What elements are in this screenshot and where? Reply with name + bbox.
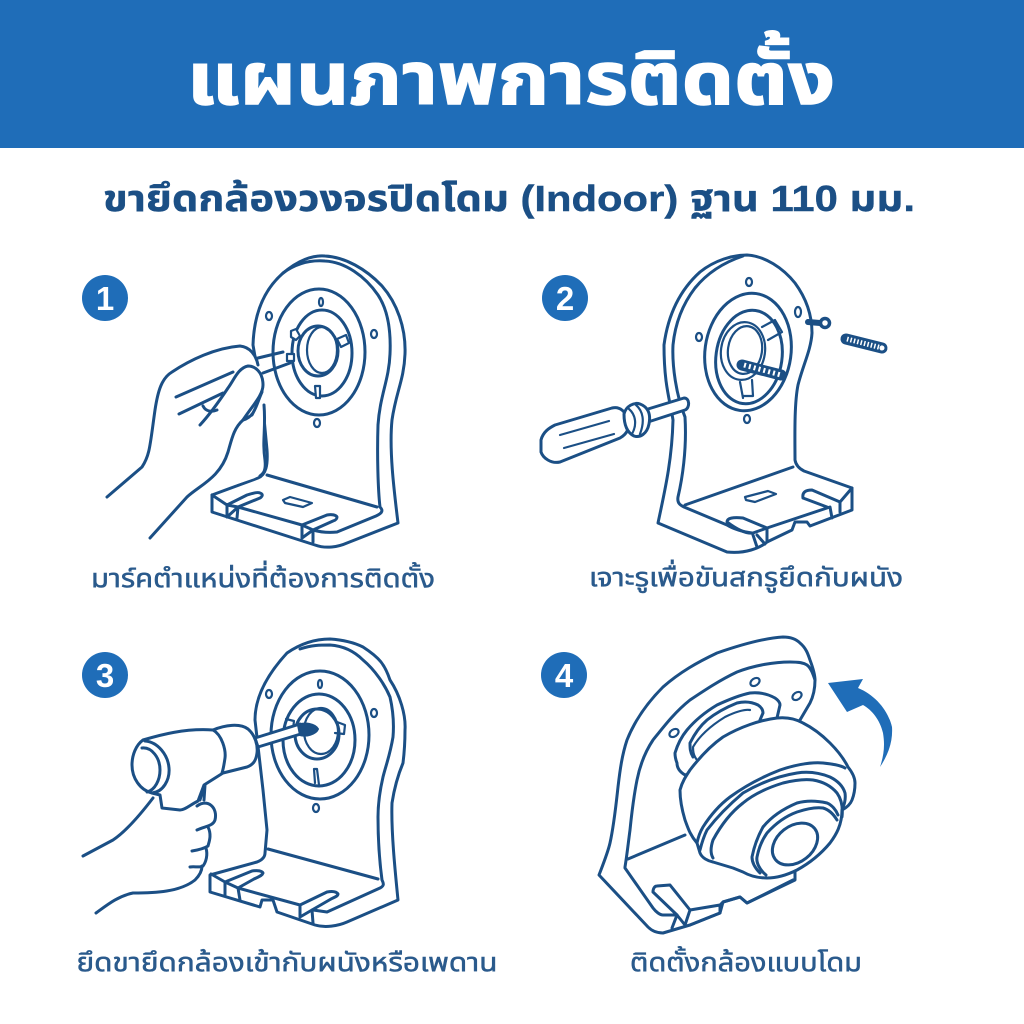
mounting ring 4 bbox=[675, 693, 780, 775]
subtitle: ขายึดกล้องวงจรปิดโดม (Indoor) ฐาน 110 มม. bbox=[103, 178, 915, 219]
drill bit bbox=[255, 724, 318, 747]
arrow bbox=[828, 679, 892, 767]
panel: step 4 bbox=[541, 637, 892, 977]
badge 3 bbox=[82, 652, 128, 698]
left slot 1 bbox=[212, 493, 262, 518]
left slot 2 bbox=[727, 518, 767, 547]
right slot 1 bbox=[238, 507, 337, 542]
screw in centre bbox=[742, 365, 781, 375]
badge 2 bbox=[542, 275, 588, 321]
dome camera bbox=[680, 718, 855, 878]
badge 4 bbox=[541, 652, 587, 698]
hand holding pen bbox=[107, 346, 267, 538]
bracket 4 bbox=[599, 637, 815, 933]
centre slot 2 bbox=[745, 491, 776, 502]
title banner: แผนภาพการติดตั้ง bbox=[187, 31, 835, 120]
screw loose bbox=[846, 339, 884, 350]
screw at hole bbox=[808, 318, 830, 328]
hand on drill bbox=[83, 797, 216, 913]
panel: step 3 bbox=[76, 639, 498, 977]
title banner bbox=[0, 0, 1024, 148]
drill body bbox=[132, 725, 257, 810]
bracket 3 bbox=[210, 639, 405, 926]
badge 4: 4 bbox=[555, 657, 574, 694]
caption 1: มาร์คตำแหน่งที่ต้องการติดตั้ง bbox=[91, 560, 435, 593]
slot 4 bbox=[653, 885, 690, 928]
marker pen bbox=[258, 352, 294, 373]
caption 3: ยึดขายึดกล้องเข้ากับผนังหรือเพดาน bbox=[76, 947, 498, 977]
badge 2: 2 bbox=[556, 280, 574, 317]
badge 3: 3 bbox=[96, 657, 114, 694]
centre slot 1 bbox=[283, 497, 312, 507]
right slot 3 bbox=[238, 888, 338, 923]
bracket 1 bbox=[212, 256, 405, 547]
panel: step 1 bbox=[82, 256, 435, 593]
bracket 2 bbox=[658, 255, 852, 552]
badge 1 bbox=[82, 275, 128, 321]
left slot 3 bbox=[211, 871, 263, 900]
caption 4: ติดตั้งกล้องแบบโดม bbox=[630, 945, 862, 977]
panel: step 2 bbox=[541, 255, 903, 593]
screwdriver bbox=[541, 398, 689, 462]
badge 1: 1 bbox=[96, 280, 114, 317]
right slot 2 bbox=[767, 488, 852, 528]
caption 2: เจาะรูเพื่อขันสกรูยึดกับผนัง bbox=[589, 559, 903, 593]
